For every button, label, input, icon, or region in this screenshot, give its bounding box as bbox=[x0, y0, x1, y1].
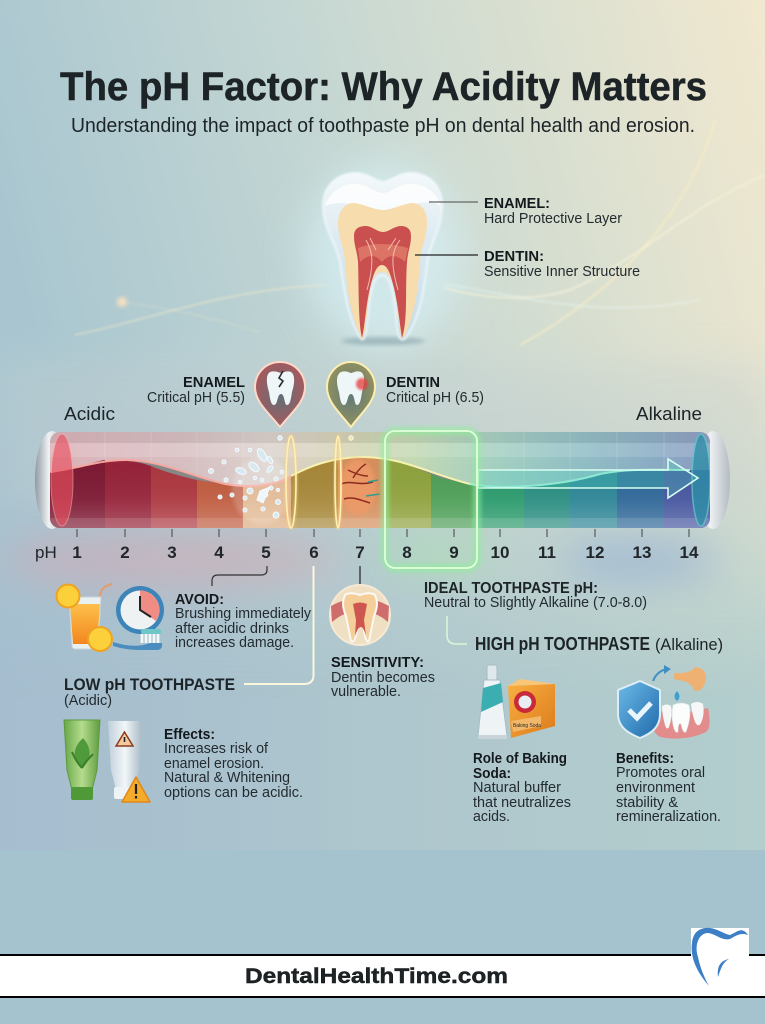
ideal range highlight bbox=[385, 431, 477, 568]
text: sensitivity: SENSITIVITY: bbox=[331, 654, 424, 671]
text: effects: enamel erosion. bbox=[164, 755, 264, 772]
text: benefits: stability & bbox=[616, 794, 678, 811]
text: role of baking soda: Soda: bbox=[473, 765, 511, 782]
text: ideal toothpaste pH bbox=[424, 580, 647, 611]
footer band bbox=[0, 954, 765, 998]
text: effects: Increases risk of bbox=[164, 740, 269, 757]
pH scale bbox=[35, 529, 699, 562]
text: effects: options can be acidic. bbox=[164, 784, 303, 801]
logo: tooth bbox=[691, 928, 749, 988]
heading: low pH toothpaste: LOW pH TOOTHPASTE bbox=[64, 675, 235, 694]
label: enamel: Hard Protective Layer bbox=[484, 210, 622, 227]
text: sensitivity bbox=[331, 654, 435, 700]
pH tube bbox=[35, 431, 730, 530]
text: dentin critical pH: DENTIN bbox=[386, 374, 440, 391]
pH scale: 1 bbox=[72, 543, 82, 562]
pH scale: 14 bbox=[680, 543, 699, 562]
label: dentin bbox=[415, 248, 640, 280]
footer website: DentalHealthTime.com bbox=[245, 965, 508, 988]
heading: low pH toothpaste bbox=[64, 675, 235, 709]
text: benefits bbox=[616, 750, 721, 825]
label: enamel: ENAMEL: bbox=[484, 195, 550, 212]
erosion particles bbox=[208, 436, 353, 518]
text: benefits: Benefits: bbox=[616, 750, 674, 767]
icon: white toothpaste tube with warning bbox=[108, 721, 150, 802]
icon: shield, gums and saliva bbox=[618, 665, 710, 739]
text: role of baking soda: Role of Baking bbox=[473, 750, 567, 767]
text: sensitivity: vulnerable. bbox=[331, 683, 401, 700]
glowing pH boundary rings bbox=[286, 436, 341, 528]
text: benefits: environment bbox=[616, 779, 696, 796]
pH scale: 3 bbox=[167, 543, 177, 562]
pH scale: 9 bbox=[449, 543, 459, 562]
subtitle: Understanding the impact of toothpaste pH on dental health and erosion. bbox=[71, 115, 695, 137]
pH scale: 2 bbox=[120, 543, 130, 562]
text: avoid: Brushing immediately bbox=[175, 605, 311, 622]
arrow bbox=[478, 459, 698, 498]
pin: dentin critical pH bbox=[327, 362, 375, 427]
connector: pH 5 to avoid bbox=[212, 566, 267, 586]
icon: tooth cross-section in gum bbox=[330, 585, 390, 645]
label: dentin: DENTIN: bbox=[484, 248, 544, 265]
text: effects: Effects: bbox=[164, 726, 215, 743]
text: avoid bbox=[175, 591, 311, 651]
title: The pH Factor: Why Acidity Matters bbox=[60, 65, 707, 109]
heading: high pH toothpaste: HIGH pH TOOTHPASTE bbox=[475, 634, 650, 654]
liquid body bbox=[50, 457, 710, 530]
text: benefits: remineralization. bbox=[616, 808, 721, 825]
label: dentin: Sensitive Inner Structure bbox=[484, 263, 640, 280]
icon: toothpaste and baking soda: Baking Soda bbox=[513, 723, 542, 729]
pin: enamel critical pH bbox=[255, 362, 305, 427]
pH scale: 8 bbox=[402, 543, 412, 562]
icon: juice and lemons bbox=[56, 584, 112, 651]
label: enamel bbox=[429, 195, 622, 227]
pH scale: 13 bbox=[633, 543, 651, 562]
text: avoid: after acidic drinks bbox=[175, 620, 289, 637]
pH scale: 6 bbox=[309, 543, 319, 562]
icon: toothpaste and baking soda bbox=[478, 665, 555, 739]
text: role of baking soda: Natural buffer bbox=[473, 779, 561, 796]
text: dentin critical pH bbox=[386, 374, 484, 406]
pH scale: pH bbox=[35, 543, 57, 562]
pH scale: 12 bbox=[586, 543, 604, 562]
dentin damage bbox=[340, 459, 380, 515]
tooth diagram bbox=[323, 173, 442, 345]
pH scale: 11 bbox=[538, 543, 556, 562]
pH scale: 5 bbox=[261, 543, 271, 562]
text: dentin critical pH: Critical pH (6.5) bbox=[386, 389, 484, 406]
heading: low pH toothpaste: (Acidic) bbox=[64, 692, 112, 709]
icon: green toothpaste tube bbox=[64, 720, 100, 800]
text: avoid: increases damage. bbox=[175, 634, 294, 651]
text: benefits: Promotes oral bbox=[616, 764, 705, 781]
text: enamel critical pH: Critical pH (5.5) bbox=[147, 389, 245, 406]
connector: pH 6 to low pH toothpaste bbox=[244, 566, 314, 684]
text: avoid: AVOID: bbox=[175, 591, 224, 608]
text: enamel critical pH bbox=[147, 374, 245, 406]
text: ideal toothpaste pH: IDEAL TOOTHPASTE pH: bbox=[424, 580, 598, 597]
pH scale: 4 bbox=[214, 543, 224, 562]
label: acidic: Acidic bbox=[64, 404, 115, 424]
text: role of baking soda: that neutralizes bbox=[473, 794, 571, 811]
heading: high pH toothpaste: (Alkaline) bbox=[655, 635, 723, 654]
text: role of baking soda bbox=[473, 750, 571, 825]
text: enamel critical pH: ENAMEL bbox=[183, 374, 245, 391]
text: sensitivity: Dentin becomes bbox=[331, 669, 435, 686]
text: effects: Natural & Whitening bbox=[164, 769, 290, 786]
connector: pH 7 to sensitivity bbox=[359, 566, 361, 586]
text: ideal toothpaste pH: Neutral to Slightly Alkaline (7.0-8.0) bbox=[424, 594, 647, 611]
pH scale: 10 bbox=[491, 543, 509, 562]
text: effects bbox=[164, 726, 303, 801]
connector: ideal to high pH bbox=[447, 616, 467, 644]
pH scale: 7 bbox=[355, 543, 365, 562]
label: alkaline: Alkaline bbox=[636, 404, 702, 424]
icon: clock and toothbrush bbox=[113, 586, 164, 650]
text: role of baking soda: acids. bbox=[473, 808, 510, 825]
